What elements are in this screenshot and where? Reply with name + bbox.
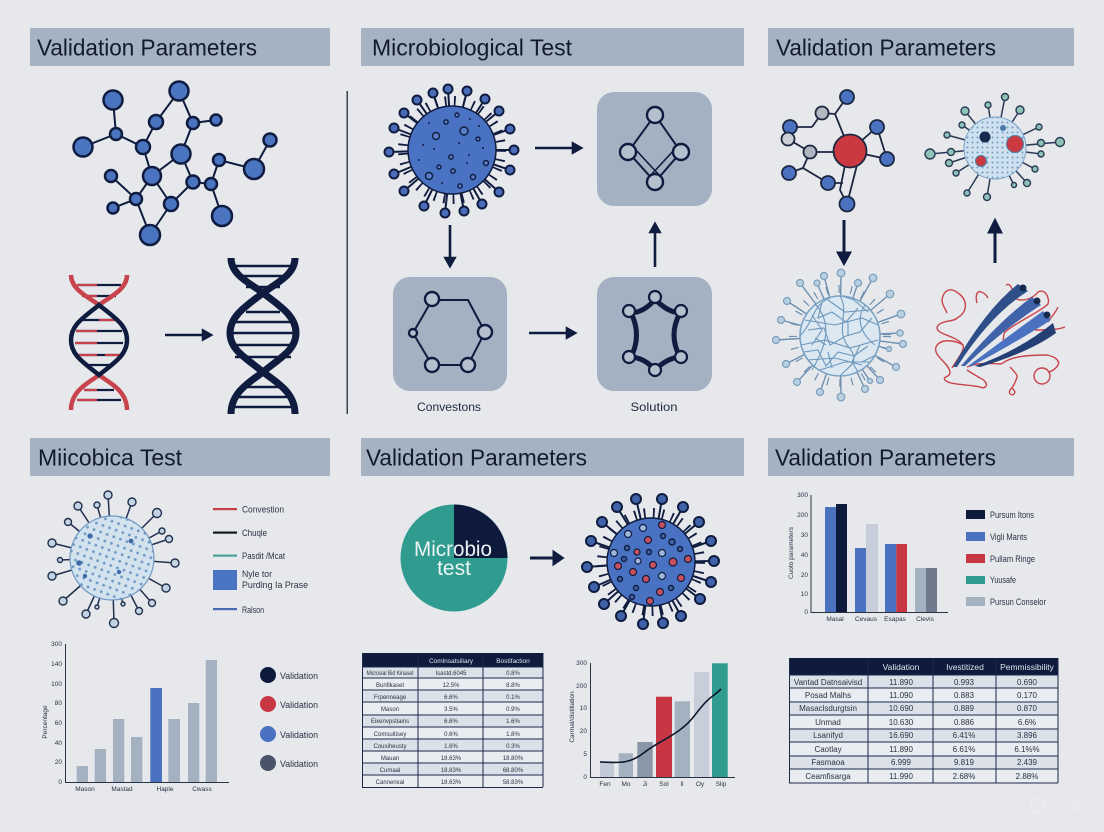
panel: hexagon molecule xyxy=(393,277,507,391)
icon: protein ribbon xyxy=(936,284,1065,395)
icon: dotted virus with red inclusions xyxy=(925,94,1064,200)
table: bottom right: 0.993 xyxy=(954,678,975,687)
grouped bar chart: bottom right: 30 xyxy=(801,532,808,539)
legend: virus key: Convestion xyxy=(242,504,284,514)
grouped bar chart: bottom right: Cevaus xyxy=(855,616,878,623)
bar chart: bottom left: Cwass xyxy=(192,786,212,793)
table: bottom right: 6.1%% xyxy=(1014,745,1040,754)
bar chart: bottom left: 300 xyxy=(51,641,62,648)
table: bottom right: Ivestitized xyxy=(946,662,984,672)
bar chart: bottom left: Percentage xyxy=(42,705,49,739)
arrow: protein up to virus xyxy=(990,221,1000,263)
header: Validation Parameters bottom middle: Validation Parameters xyxy=(366,444,587,470)
legend: validation dots: Validation xyxy=(280,730,318,740)
arrow: virus down xyxy=(446,225,454,266)
table: bottom right: 11.090 xyxy=(889,691,913,700)
legend: validation dots: Validation xyxy=(280,759,318,769)
bar chart: bottom left: 0 xyxy=(58,779,62,786)
arrow: hexagon to ring xyxy=(529,328,575,338)
pie chart: Microbio test: test xyxy=(437,557,471,580)
table: bottom right: 2.68% xyxy=(953,772,975,781)
bar chart: bottom left: 80 xyxy=(55,700,62,707)
table: middle: Cousiheusty xyxy=(373,744,407,750)
legend: virus key: Pasdit /Mcat xyxy=(242,551,285,561)
grouped bar chart: bottom right xyxy=(788,492,948,623)
table: bottom right: Ceamfisarga xyxy=(805,772,851,781)
panel: bold ring molecule xyxy=(597,277,712,391)
bar and line chart: middle right: Il xyxy=(680,781,684,788)
table: bottom right: 16.690 xyxy=(889,731,914,740)
header: Validation Parameters top right xyxy=(768,28,1074,66)
header: Validation Parameters top left xyxy=(30,28,330,66)
legend: grouped bars: Pullam Ringe xyxy=(990,554,1035,564)
legend: virus key xyxy=(213,504,308,615)
icon: dotted virus with legend left xyxy=(48,491,179,628)
bar and line chart: middle right: Ji xyxy=(643,781,647,788)
legend: grouped bars: Yuusafe xyxy=(990,575,1016,585)
header: Validation Parameters bottom right xyxy=(768,438,1074,476)
table: bottom right: Validation xyxy=(883,662,920,672)
bar chart: bottom left: Mason xyxy=(75,786,95,793)
icon: mesh virus xyxy=(772,269,906,401)
table: bottom right: 2.88% xyxy=(1016,772,1038,781)
icon: red and navy DNA helix xyxy=(71,275,127,410)
table: middle: 0.1% xyxy=(506,695,520,701)
label: Solution: Solution xyxy=(630,400,678,414)
bar and line chart: middle right: Carmal/distillation xyxy=(569,691,576,743)
bar chart: bottom left: 40 xyxy=(55,740,62,747)
bar and line chart: middle right: 5 xyxy=(583,751,587,758)
table: middle: 68.80% xyxy=(503,768,524,774)
table: middle: 0.3% xyxy=(506,744,520,750)
grouped bar chart: bottom right: Cuoto parameters xyxy=(788,526,795,579)
table: bottom right: 2.439 xyxy=(1017,758,1038,767)
bar and line chart: middle right: 0 xyxy=(583,774,587,781)
table: middle: Bunfikaset xyxy=(376,683,404,689)
pie chart: Microbio test xyxy=(400,504,508,612)
table: middle: Cannenxal xyxy=(376,780,404,786)
legend: virus key: Nyle tor xyxy=(242,569,272,579)
vertical divider xyxy=(346,91,348,414)
header: Validation Parameters bottom middle xyxy=(361,438,744,476)
table: middle: 1.6% xyxy=(444,744,458,750)
bar chart: bottom left: Haple xyxy=(157,786,174,793)
header: Miicobica Test xyxy=(30,438,330,476)
bar chart: bottom left: 60 xyxy=(55,720,62,727)
arrow: ring up to diamond xyxy=(650,224,660,267)
table: bottom right: 0.883 xyxy=(954,691,975,700)
bar and line chart: middle right: 200 xyxy=(576,683,587,690)
bar and line chart: middle right: 300 xyxy=(576,660,587,667)
table: bottom right: 10.630 xyxy=(889,718,914,727)
table: bottom right: 11.990 xyxy=(889,772,913,781)
table: middle: Eixenvpstiains xyxy=(371,719,409,725)
header: Microbiological Test xyxy=(361,28,744,66)
grouped bar chart: bottom right: 200 xyxy=(797,512,808,519)
table: middle: 18.63% xyxy=(441,756,462,762)
table: middle: 1.6% xyxy=(506,719,520,725)
header: Microbiological Test: Microbiological Test xyxy=(372,34,573,60)
table: middle: 18.83% xyxy=(441,768,462,774)
table: middle: Cumaal xyxy=(380,768,400,774)
grouped bar chart: bottom right: Masal xyxy=(826,616,844,623)
table: middle: Comlnsatsiliary xyxy=(429,658,474,665)
table: bottom right: Vantad Datnsaivisd xyxy=(794,678,862,687)
table: bottom right: 0.170 xyxy=(1017,691,1038,700)
table: bottom right: 10.690 xyxy=(889,704,914,713)
legend: validation dots xyxy=(260,667,318,771)
molecule network xyxy=(74,82,276,245)
bar and line chart: middle right: 10 xyxy=(580,705,587,712)
table: bottom right: 11.890 xyxy=(889,745,913,754)
table: bottom right: 6.41% xyxy=(953,731,975,740)
arrow: pie to virus xyxy=(530,552,562,564)
icon: navy DNA helix xyxy=(230,258,296,414)
table: bottom right: 0.889 xyxy=(954,704,975,713)
watermark: Grok xyxy=(1031,799,1083,816)
table: middle: 12.5% xyxy=(442,683,460,689)
bar and line chart: middle right: Mo xyxy=(621,781,631,788)
grouped bar chart: bottom right: 300 xyxy=(797,492,808,499)
pie chart: Microbio test: Microbio xyxy=(414,538,492,561)
table: middle: 6.6% xyxy=(444,719,458,725)
table: bottom right: 3.896 xyxy=(1017,731,1038,740)
grouped bar chart: bottom right: 20 xyxy=(801,572,808,579)
bar chart: bottom left xyxy=(42,641,229,793)
bar and line chart: middle right: 20 xyxy=(580,728,587,735)
bar and line chart: middle right xyxy=(569,660,735,788)
label: Convestons: Convestons xyxy=(417,400,481,414)
table: middle xyxy=(362,653,543,788)
table: middle: 18.63% xyxy=(441,780,462,786)
table: middle: 0.8% xyxy=(506,671,520,677)
table: middle: 0.6% xyxy=(444,732,458,738)
bar and line chart: middle right: Fen xyxy=(599,781,611,788)
icon: blue virus xyxy=(384,84,518,218)
legend: validation dots: Validation xyxy=(280,671,318,681)
icon: virus with coloured inclusions xyxy=(582,494,719,629)
table: middle: 58.83% xyxy=(503,780,524,786)
header: Validation Parameters top right: Validation Parameters xyxy=(776,34,996,60)
legend: grouped bars xyxy=(966,510,1046,607)
table: bottom right: 0.690 xyxy=(1017,678,1038,687)
table: middle: Microsial Bid Kinaset xyxy=(366,671,414,677)
table: middle: Isastd.6045 xyxy=(435,671,467,677)
bar and line chart: middle right: Oy xyxy=(696,781,705,788)
legend: validation dots: Validation xyxy=(280,700,318,710)
table: bottom right: Masaclsdurgtsin xyxy=(799,704,857,713)
table: bottom right: 9.819 xyxy=(954,758,975,767)
table: bottom right: 6.6% xyxy=(1018,718,1036,727)
arrow: network down xyxy=(838,220,850,263)
table: middle: Frpenneage xyxy=(374,695,407,701)
bar chart: bottom left: 20 xyxy=(55,759,62,766)
table: middle: 0.9% xyxy=(506,707,520,713)
table: bottom right: Pemmissibility xyxy=(1000,662,1055,672)
legend: virus key: Chuqle xyxy=(242,528,267,538)
grouped bar chart: bottom right: Esapas xyxy=(884,616,907,623)
grouped bar chart: bottom right: 0 xyxy=(804,609,808,616)
legend: virus key: Ralson xyxy=(242,605,264,615)
header: Miicobica Test: Miicobica Test xyxy=(38,444,183,470)
table: bottom right: Posad Malhs xyxy=(805,691,851,700)
legend: virus key: Purdlng Ia Prase xyxy=(242,580,308,590)
table: bottom right: 0.886 xyxy=(954,718,975,727)
table: middle: Bostifaction xyxy=(496,658,530,665)
table: bottom right: Lsanifyd xyxy=(813,731,843,740)
grouped bar chart: bottom right: Clevis xyxy=(916,616,935,623)
table: bottom right: Fasmaoa xyxy=(811,758,845,767)
table: bottom right: 6.61% xyxy=(953,745,975,754)
bar chart: bottom left: 100 xyxy=(51,681,62,688)
table: bottom right: Unmad xyxy=(815,718,841,727)
bar and line chart: middle right: Slip xyxy=(716,781,727,788)
table: bottom right xyxy=(789,658,1058,783)
legend: grouped bars: Vigli Mants xyxy=(990,532,1028,542)
table: bottom right: 11.890 xyxy=(889,678,913,687)
table: middle: Mason xyxy=(381,707,399,713)
watermark: Grok: Grok xyxy=(1050,799,1083,816)
table: middle: 3.5% xyxy=(444,707,458,713)
table: bottom right: 0.870 xyxy=(1017,704,1038,713)
arrow: DNA to DNA xyxy=(165,330,211,340)
panel: diamond molecule xyxy=(597,92,712,206)
arrow: virus to diamond xyxy=(535,144,581,152)
bar chart: bottom left: 140 xyxy=(51,661,62,668)
table: bottom right: Caotlay xyxy=(814,745,842,754)
table: middle: Comsuitisey xyxy=(374,732,406,738)
table: middle: 6.6% xyxy=(444,695,458,701)
grouped bar chart: bottom right: 10 xyxy=(801,591,808,598)
bar chart: bottom left: Mastad xyxy=(111,786,133,793)
grouped bar chart: bottom right: 40 xyxy=(801,552,808,559)
molecule network with red core xyxy=(782,90,894,212)
table: middle: 8.8% xyxy=(506,683,520,689)
legend: grouped bars: Pursun Conselor xyxy=(990,597,1046,607)
table: middle: 1.8% xyxy=(506,732,520,738)
table: middle: Mauan xyxy=(381,756,399,762)
bar and line chart: middle right: Sol xyxy=(659,781,669,788)
header: Validation Parameters bottom right: Validation Parameters xyxy=(775,444,996,470)
header: Validation Parameters top left: Validation Parameters xyxy=(37,34,257,60)
table: middle: 18.80% xyxy=(503,756,524,762)
legend: grouped bars: Pursum Itons xyxy=(990,510,1035,520)
table: bottom right: 6.999 xyxy=(891,758,912,767)
